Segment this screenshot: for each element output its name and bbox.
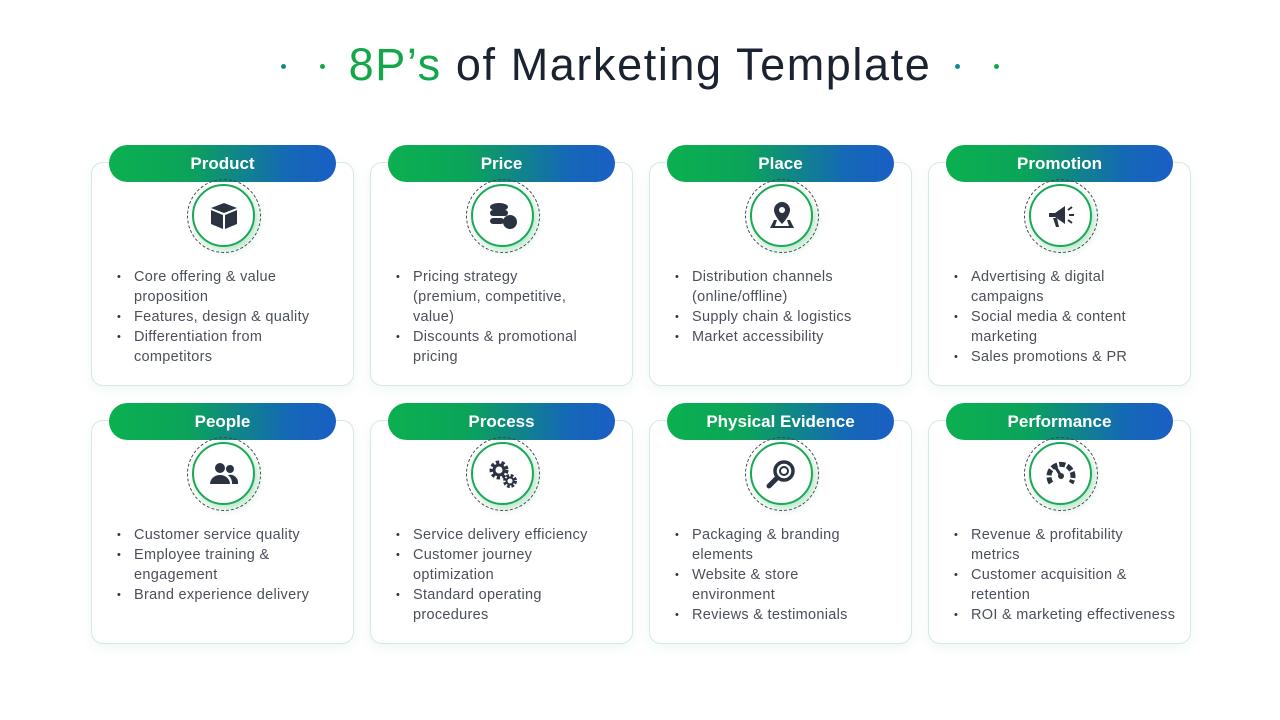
panel: Price: value) [413, 309, 454, 325]
panel: People: Employee training & [134, 547, 269, 563]
panel: People: People [195, 412, 250, 431]
panel: Place: Supply chain & logistics [692, 309, 852, 325]
panel: Physical Evidence: Website & store [692, 567, 799, 583]
panel: Physical Evidence: Reviews & testimonials [692, 607, 848, 623]
panel: Promotion: campaigns [971, 289, 1044, 305]
panel: Price: (premium, competitive, [413, 289, 566, 305]
panel: Place: Place [758, 154, 803, 173]
panel: Product: Differentiation from [134, 329, 262, 345]
panel: Process: Service delivery efficiency [413, 527, 588, 543]
icon: people [187, 437, 261, 511]
panel: Process: Process [468, 412, 535, 431]
panel: Product: proposition [134, 289, 208, 305]
panel: Performance [928, 420, 1191, 644]
icon: gauge [1024, 437, 1098, 511]
panel: Promotion: Social media & content [971, 309, 1126, 325]
panel: Product [91, 162, 354, 386]
icon: coins [466, 179, 540, 253]
panel: Product: competitors [134, 349, 212, 365]
icon: megaphone [1024, 179, 1098, 253]
panel: Physical Evidence [649, 420, 912, 644]
icon: magnifier [745, 437, 819, 511]
panel: Promotion: Advertising & digital [971, 269, 1105, 285]
panel: Performance: Customer acquisition & [971, 567, 1127, 583]
panel: Process: Standard operating [413, 587, 542, 603]
panel: Place: Distribution channels [692, 269, 833, 285]
panel: People: Brand experience delivery [134, 587, 309, 603]
panel: Performance: Performance [1008, 412, 1111, 431]
decorative dots [281, 64, 286, 69]
panel: Promotion [928, 162, 1191, 386]
panel: Process: Customer journey [413, 547, 532, 563]
panel: Performance: Revenue & profitability [971, 527, 1123, 543]
panel: Process: procedures [413, 607, 489, 623]
panel: Performance: retention [971, 587, 1030, 603]
panel: Physical Evidence: Packaging & branding [692, 527, 840, 543]
panel: Price [370, 162, 633, 386]
panel: Price: Pricing strategy [413, 269, 518, 285]
panel: Place: (online/offline) [692, 289, 788, 305]
panel: Place: Market accessibility [692, 329, 824, 345]
panel: Process [370, 420, 633, 644]
panel: Product: Features, design & quality [134, 309, 309, 325]
panel: Performance: metrics [971, 547, 1020, 563]
panel: Price: Discounts & promotional [413, 329, 577, 345]
panel: Product: Core offering & value [134, 269, 276, 285]
panel: Price: Price [481, 154, 522, 173]
panel: Product: Product [190, 154, 255, 173]
panel: Physical Evidence: elements [692, 547, 753, 563]
panel: Price: pricing [413, 349, 458, 365]
panel: Place [649, 162, 912, 386]
panel: Promotion: Promotion [1017, 154, 1102, 173]
panel: Promotion: marketing [971, 329, 1037, 345]
panel: People: Customer service quality [134, 527, 300, 543]
icon: map pin [745, 179, 819, 253]
panel: Physical Evidence: Physical Evidence [706, 412, 855, 431]
panel: Promotion: Sales promotions & PR [971, 349, 1127, 365]
panel: Performance: ROI & marketing effectiveness [971, 607, 1175, 623]
icon: gears [466, 437, 540, 511]
panel: Physical Evidence: environment [692, 587, 775, 603]
icon: box [187, 179, 261, 253]
panel: People [91, 420, 354, 644]
panel: People: engagement [134, 567, 218, 583]
panel: Process: optimization [413, 567, 494, 583]
title: 8P’s of Marketing Template [349, 39, 931, 90]
